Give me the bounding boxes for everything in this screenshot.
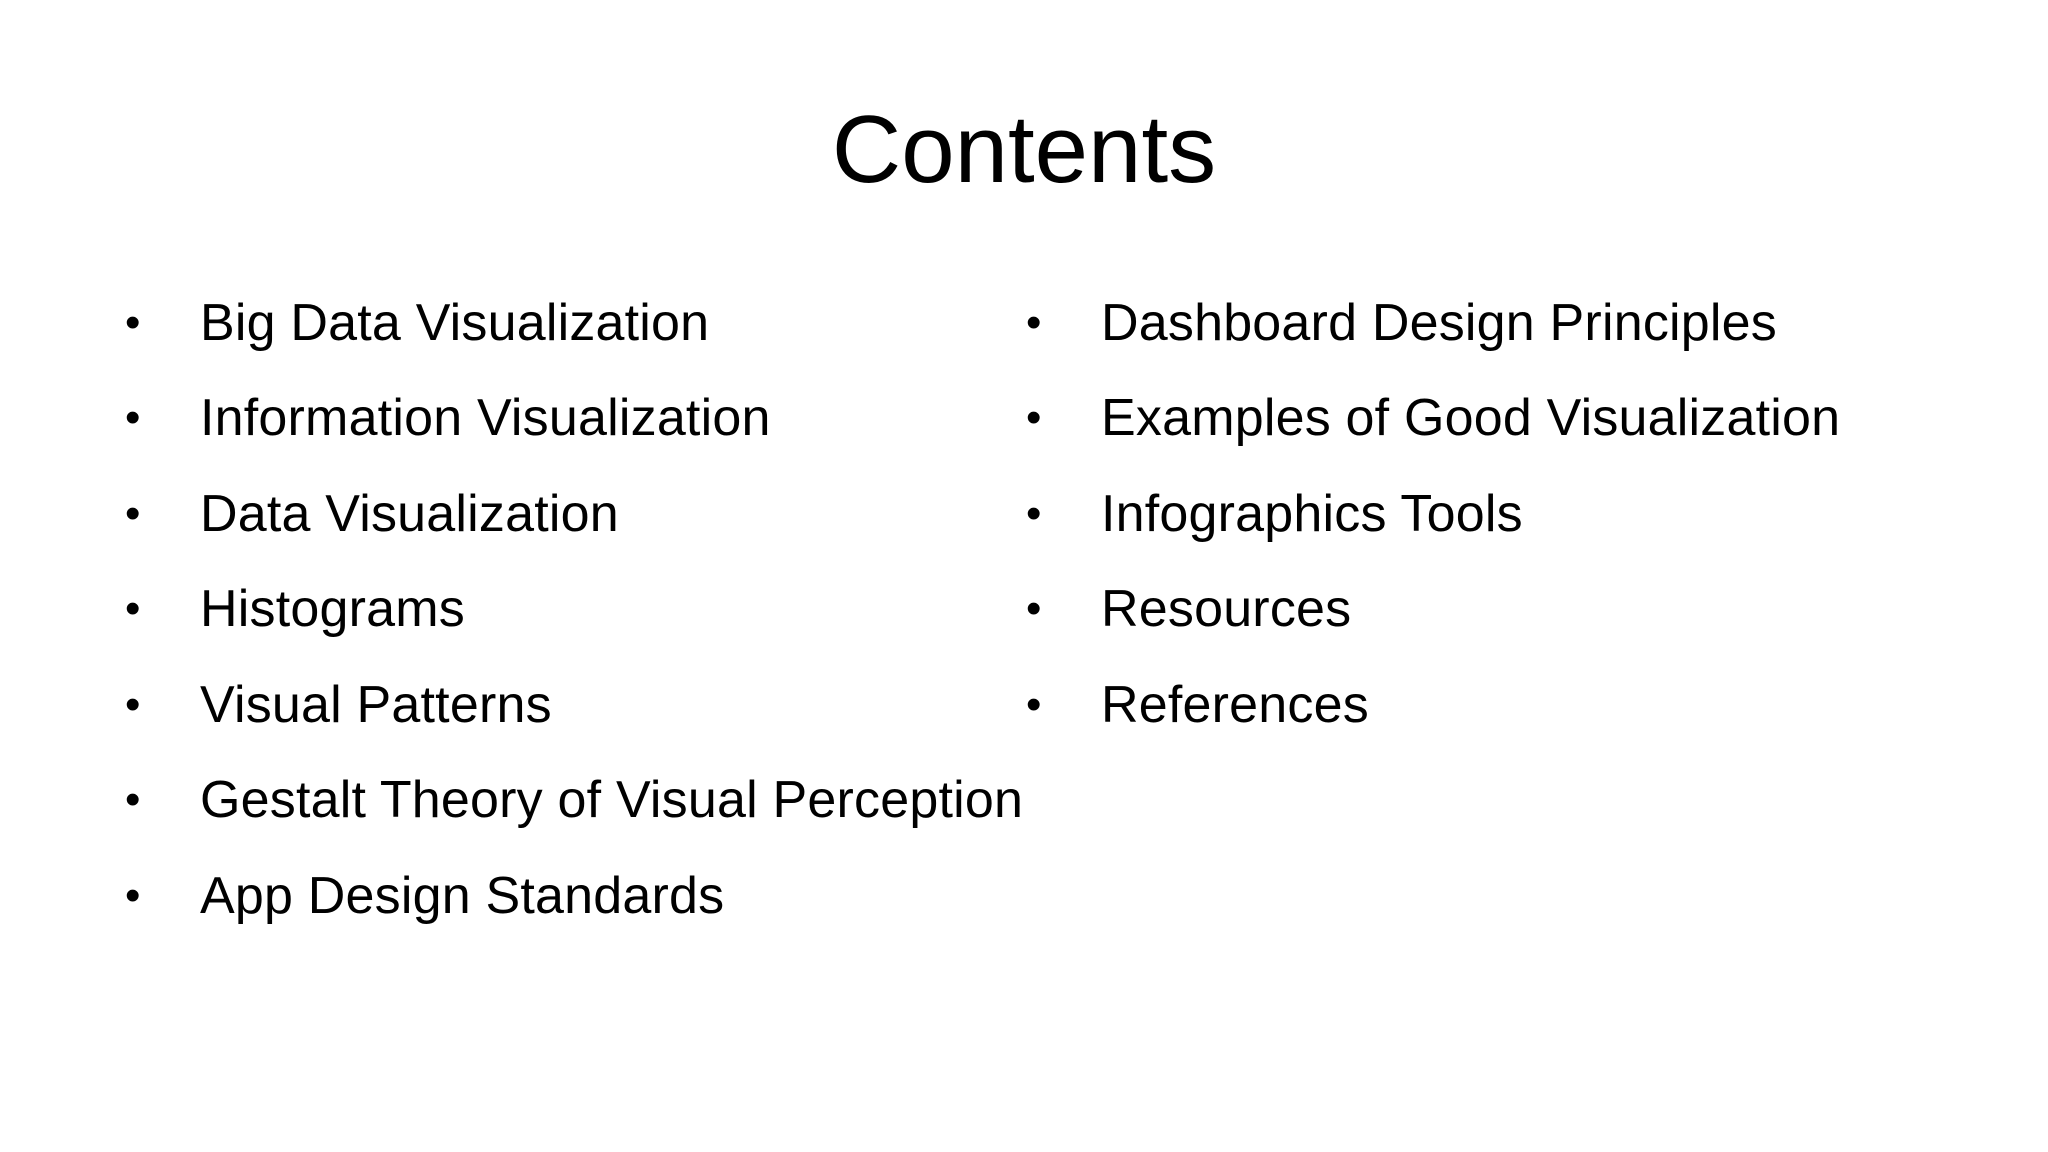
left column list: • [125, 584, 140, 633]
left column list: • [125, 871, 140, 920]
left column list: App Design Standards [200, 867, 724, 925]
left column list: Data Visualization [200, 485, 619, 543]
right column list: • [1026, 393, 1041, 442]
left column list: Information Visualization [200, 389, 771, 447]
right column list: References [1101, 676, 1369, 734]
right column list: • [1026, 298, 1041, 347]
left column list: Visual Patterns [200, 676, 552, 734]
right column list: Resources [1101, 580, 1351, 638]
left column list: • [125, 489, 140, 538]
right column list: • [1026, 584, 1041, 633]
right column list: • [1026, 680, 1041, 729]
left column list: • [125, 775, 140, 824]
left column list: • [125, 680, 140, 729]
right column list: Examples of Good Visualization [1101, 389, 1840, 447]
left column list: Big Data Visualization [200, 294, 709, 352]
title: Contents [832, 96, 1216, 203]
left column list: Histograms [200, 580, 465, 638]
right column list: Dashboard Design Principles [1101, 294, 1777, 352]
left column list: • [125, 298, 140, 347]
left column list: • [125, 393, 140, 442]
left column list [125, 294, 1023, 925]
right column list: • [1026, 489, 1041, 538]
right column list [1026, 294, 1840, 734]
right column list: Infographics Tools [1101, 485, 1523, 543]
left column list: Gestalt Theory of Visual Perception [200, 771, 1023, 829]
